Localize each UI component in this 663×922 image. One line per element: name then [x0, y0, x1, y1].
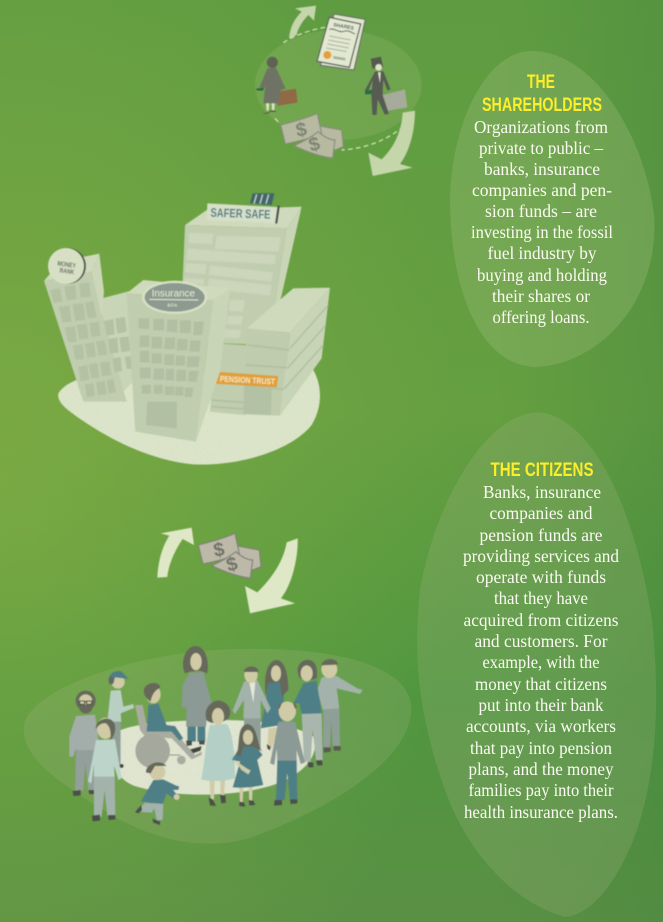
- body: citizens description: accounts, via workers: [466, 716, 616, 736]
- body: shareholders description: offering loans.: [492, 307, 590, 327]
- sign: pension trust: PENSION TRUST: [220, 374, 275, 386]
- body: shareholders description: their shares or: [492, 286, 590, 306]
- sign: money bank: [48, 248, 86, 284]
- person: girl: [232, 724, 263, 807]
- person: man with hat: [317, 659, 363, 753]
- building: safer safe: [180, 207, 302, 345]
- person: woman with teal top: [293, 660, 323, 767]
- figure: man in top hat with briefcase: [365, 57, 407, 115]
- figure: woman with briefcase: [256, 57, 298, 114]
- body: citizens description: put into their bank: [478, 695, 604, 715]
- icon: money: $: [212, 539, 226, 562]
- circle backdrop: [255, 30, 422, 140]
- sign: money bank: MONEY: [57, 260, 77, 270]
- text block: the shareholders: [471, 72, 613, 327]
- icon: money: $: [224, 554, 240, 577]
- body: citizens description: that pay into pension: [470, 738, 612, 758]
- building: pension trust: [210, 288, 330, 416]
- person: wheelchair user: [135, 683, 202, 768]
- body: shareholders description: Organizations from: [474, 117, 608, 137]
- dashed cycle path: [275, 27, 403, 150]
- body: citizens description: that they have: [494, 588, 588, 608]
- body: shareholders description: private to public –: [479, 138, 604, 158]
- arrow: top: [289, 6, 316, 38]
- person: bald man: [270, 701, 305, 806]
- panel: citizens illustration: [69, 646, 363, 825]
- arrow: down: [245, 538, 298, 613]
- heading: the shareholders: THE: [527, 72, 555, 93]
- person: boy with cap: [107, 671, 134, 768]
- arrow: right: [368, 111, 415, 176]
- body: shareholders description: sion funds – are: [485, 201, 597, 221]
- panel: money flow arrows: [157, 528, 298, 613]
- citizens text blob: [417, 413, 656, 917]
- person: bearded man: [69, 691, 100, 796]
- sign: safer safe: [207, 193, 280, 224]
- body: shareholders description: [471, 117, 613, 327]
- platform: [58, 370, 320, 465]
- sign: money bank: BANK: [59, 267, 75, 276]
- heading: the citizens: THE CITIZENS: [490, 460, 594, 481]
- sign: insurance: &Co.: [167, 303, 178, 308]
- person: woman with long hair: [261, 660, 288, 751]
- icon: money: [198, 533, 261, 578]
- shareholders text blob: [450, 51, 654, 367]
- text block: the citizens: [463, 460, 619, 822]
- document: shares: [317, 14, 365, 70]
- building: insurance: [127, 280, 230, 442]
- body: citizens description: providing services and: [463, 546, 619, 566]
- panel: shareholder cycle illustration: [255, 6, 422, 176]
- body: citizens description: companies and: [490, 503, 592, 523]
- icon: money: $: [307, 134, 323, 157]
- body: citizens description: and customers. For: [474, 631, 608, 651]
- building: money bank: [44, 254, 133, 402]
- person: running child: [135, 762, 180, 825]
- person: tall woman: [182, 646, 213, 746]
- icon: money: $: [294, 119, 309, 142]
- icon: money: [281, 113, 343, 158]
- platform: [111, 720, 315, 795]
- body: citizens description: families pay into their: [468, 780, 614, 800]
- person: man with tie: [233, 666, 271, 750]
- body: shareholders description: buying and holding: [477, 265, 607, 285]
- panel: financial institutions illustration: [44, 193, 330, 465]
- body: citizens description: pension funds are: [480, 525, 603, 545]
- body: citizens description: example, with the: [482, 652, 600, 672]
- body: citizens description: Banks, insurance: [483, 482, 601, 502]
- body: shareholders description: banks, insurance: [484, 159, 600, 179]
- document: shares: SHARES: [333, 22, 355, 32]
- body: shareholders description: fuel industry by: [488, 243, 596, 263]
- sign: safer safe: SAFER SAFE: [210, 206, 271, 222]
- body: citizens description: health insurance plans.: [464, 802, 618, 822]
- sign: insurance: Insurance: [152, 289, 195, 300]
- citizens group blob: [24, 649, 411, 844]
- body: shareholders description: companies and pen-: [472, 180, 612, 200]
- person: pregnant woman: [201, 701, 235, 806]
- heading: the shareholders: [482, 72, 602, 116]
- body: citizens description: plans, and the money: [468, 759, 614, 779]
- person: front man: [88, 718, 122, 821]
- sign: insurance: [142, 281, 207, 314]
- body: citizens description: operate with funds: [476, 567, 606, 587]
- body: shareholders description: investing in the fossil: [471, 222, 613, 242]
- heading: the shareholders: SHAREHOLDERS: [482, 95, 602, 116]
- body: citizens description: money that citizens: [475, 674, 607, 694]
- body: citizens description: acquired from citizens: [464, 610, 618, 630]
- arrow: up: [157, 528, 194, 578]
- body: citizens description: [463, 482, 619, 822]
